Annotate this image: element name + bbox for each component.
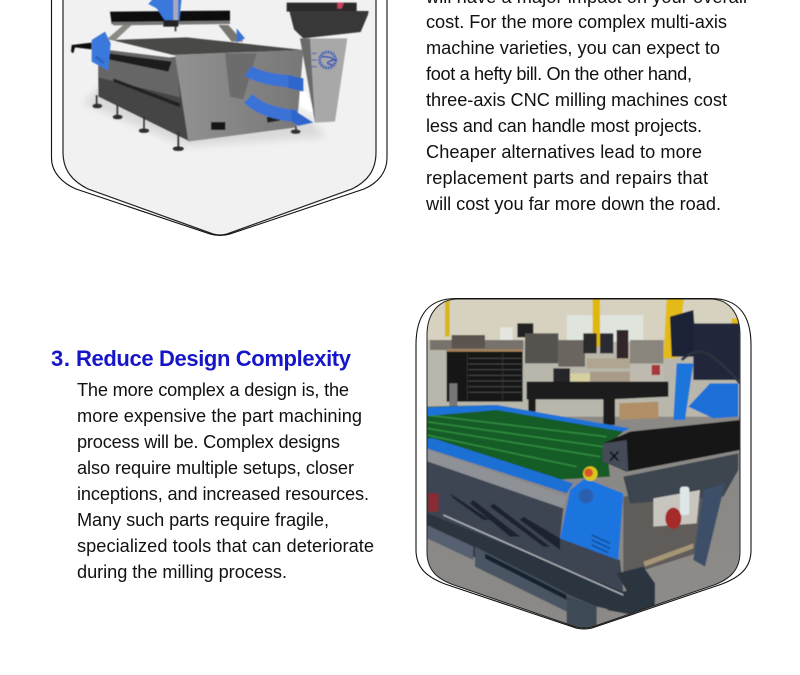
text block: design complexity paragraph: Many such parts require fragile, <box>77 510 329 530</box>
text block: cost paragraph: will cost you far more down the road. <box>425 194 721 214</box>
text block: design complexity paragraph: more expensive the part machining <box>77 406 362 426</box>
text block: cost paragraph: three-axis CNC milling machines cost <box>426 90 727 110</box>
frame: inner shield outline <box>427 299 740 628</box>
panel: machine photo 2 in shield frame <box>416 297 751 630</box>
heading: 3. Reduce Design Complexity: Reduce Design Complexity <box>76 346 352 371</box>
text block: cost paragraph: less and can handle most projects. <box>426 116 702 136</box>
text block: cost paragraph: machine varieties, you can expect to <box>426 38 720 58</box>
text block: cost paragraph: Cheaper alternatives lead to more <box>426 142 702 162</box>
text block: cost paragraph: cost. For the more complex multi-axis <box>426 12 727 32</box>
text block: design complexity paragraph: The more complex a design is, the <box>77 380 349 400</box>
text block: cost paragraph: foot a hefty bill. On the other hand, <box>426 64 692 84</box>
workshop clutter <box>452 330 663 385</box>
text block: design complexity paragraph: inceptions, and increased resources. <box>77 484 369 504</box>
text block: design complexity paragraph <box>77 380 374 582</box>
frame: outer shield outline <box>52 0 387 236</box>
panel: machine photo 1 in shield frame <box>52 0 387 240</box>
frame: outer shield outline <box>416 298 751 629</box>
photo: CNC plasma table in workshop <box>423 297 743 630</box>
text block: cost paragraph <box>425 0 747 214</box>
text block: design complexity paragraph: during the milling process. <box>77 562 287 582</box>
heading: 3. Reduce Design Complexity: 3. <box>51 346 70 371</box>
text block: cost paragraph: replacement parts and repairs that <box>426 168 708 188</box>
frame: inner shield outline <box>63 0 376 235</box>
text block: design complexity paragraph: process will be. Complex designs <box>77 432 340 452</box>
text block: design complexity paragraph: specialized tools that can deteriorate <box>77 536 374 556</box>
text block: design complexity paragraph: also require multiple setups, closer <box>77 458 354 478</box>
photo: CNC machine on grey background <box>60 0 380 240</box>
